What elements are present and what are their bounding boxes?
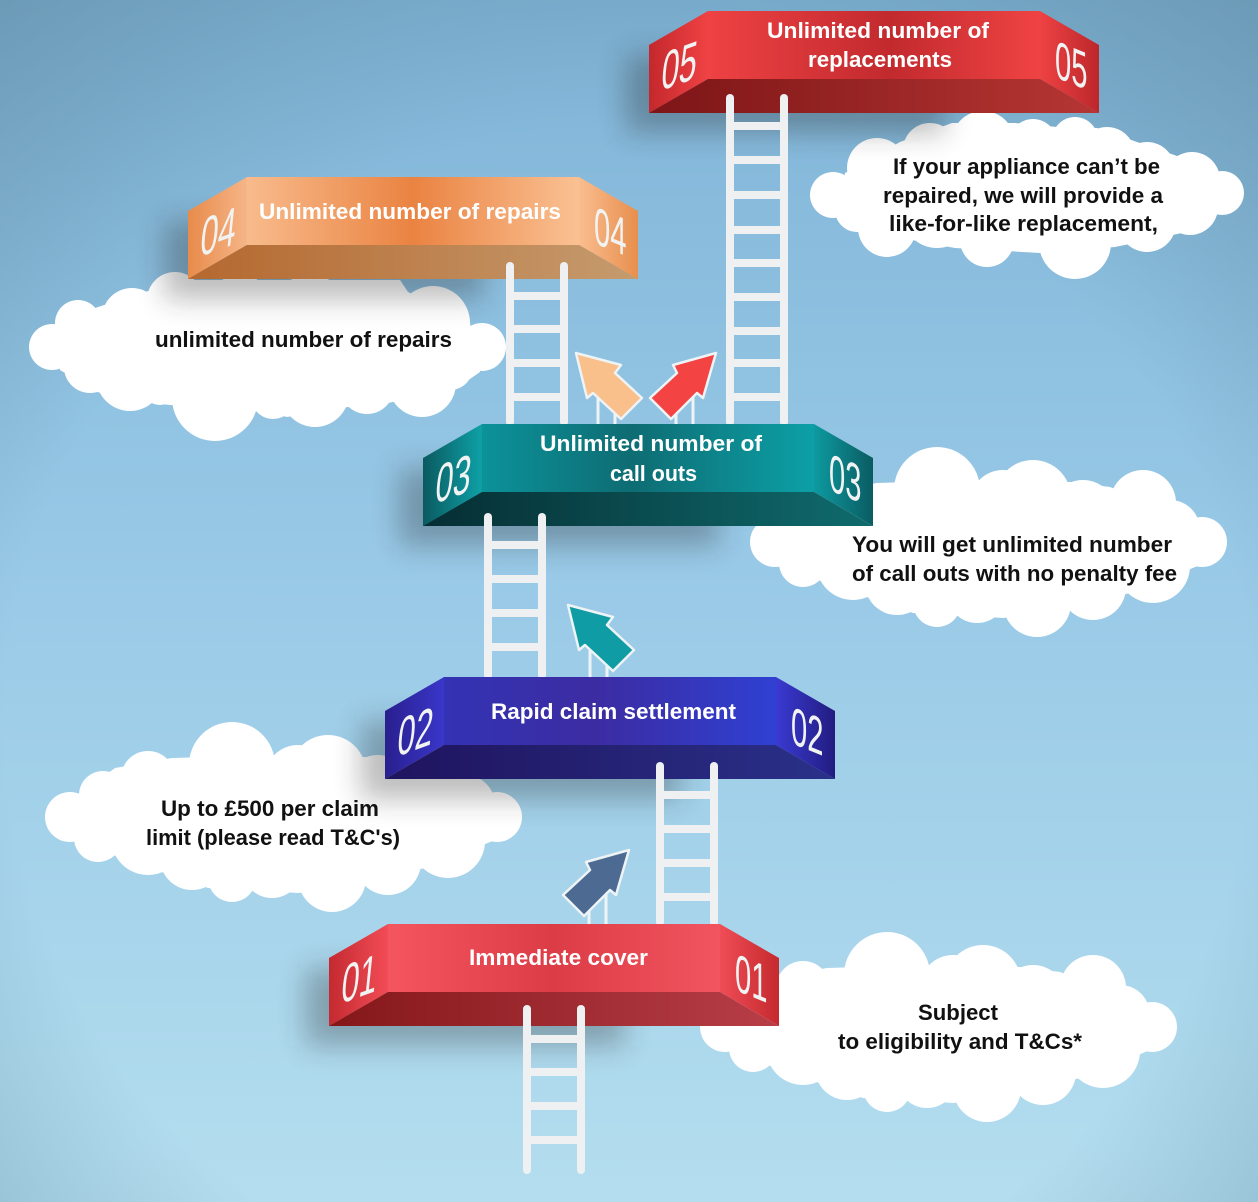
arrow: red to 05 (650, 353, 716, 424)
platform 03: 03 (433, 442, 474, 516)
heading 01: Immediate cover (469, 945, 648, 970)
cloud: claim settlement (45, 722, 522, 912)
text: replacements cloud: repaired, we will provide a (883, 183, 1164, 208)
platform 05: 05 (1055, 31, 1087, 102)
ladder 02 to 03 (484, 513, 546, 679)
heading 03: call outs (610, 461, 697, 486)
platform 01: 01 (735, 944, 767, 1015)
platform 04: 04 (594, 197, 626, 268)
text: replacements cloud (883, 154, 1164, 236)
ladder below 01 (523, 1005, 585, 1174)
ladder 03 to 04 (506, 262, 568, 426)
heading 02: Rapid claim settlement (491, 699, 737, 724)
arrow: blue to 02 (563, 850, 629, 924)
ladder 04 to 05 (726, 94, 788, 426)
cloud: repairs (29, 272, 506, 441)
platform 02 (361, 677, 835, 799)
heading 04: Unlimited number of repairs (259, 199, 561, 224)
platform 02: 02 (791, 697, 823, 768)
arrow: peach to 04 (576, 353, 642, 424)
heading 03 (540, 431, 763, 486)
platform 04 (164, 177, 638, 299)
platform 04: 04 (198, 195, 239, 269)
heading 03: Unlimited number of (540, 431, 763, 456)
text: claim cloud: Up to £500 per claim (161, 796, 379, 821)
text: repairs cloud: unlimited number of repairs (155, 327, 452, 352)
heading 05 (767, 18, 990, 72)
text: call outs cloud (852, 532, 1177, 586)
platform 05: 05 (659, 29, 700, 103)
cloud: immediate cover (700, 932, 1177, 1122)
platform 02: 02 (395, 695, 436, 769)
cloud: replacements (810, 111, 1244, 279)
platform 01 (305, 924, 779, 1046)
text: claim cloud: limit (please read T&C's) (146, 825, 400, 850)
text: cover cloud: Subject (918, 1000, 999, 1025)
ladder 01 to 02 (656, 762, 718, 926)
text: claim cloud (146, 796, 400, 850)
text: cover cloud: to eligibility and T&Cs* (838, 1029, 1082, 1054)
text: replacements cloud: like-for-like replacement, (889, 211, 1158, 236)
arrow: teal to 03 (568, 605, 634, 677)
text: call outs cloud: of call outs with no penalty fee (852, 561, 1177, 586)
heading 05: replacements (808, 47, 952, 72)
text: replacements cloud: If your appliance can’t be (893, 154, 1160, 179)
platform 03 (399, 424, 873, 546)
cloud: call outs (750, 447, 1227, 637)
platform 01: 01 (339, 942, 380, 1016)
heading 05: Unlimited number of (767, 18, 990, 43)
platform 05 (625, 11, 1099, 133)
text: cover cloud (838, 1000, 1082, 1054)
text: call outs cloud: You will get unlimited number (852, 532, 1172, 557)
platform 03: 03 (829, 444, 861, 515)
